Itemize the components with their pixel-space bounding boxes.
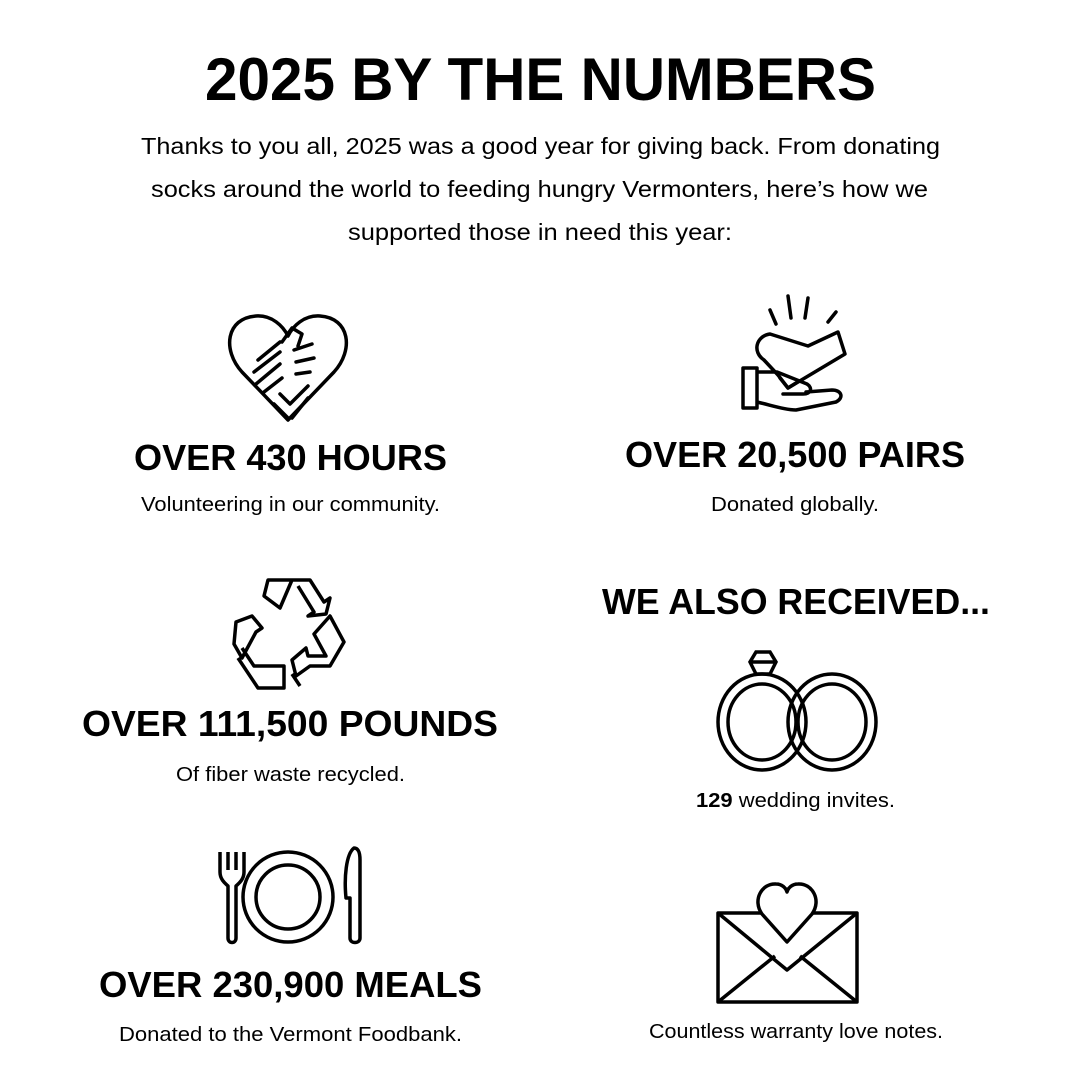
icon: recycle xyxy=(234,580,344,688)
icon: sock and hand xyxy=(743,296,845,410)
text: fiber waste: Of fiber waste recycled. xyxy=(176,764,405,786)
heading: pairs: OVER 20,500 PAIRS xyxy=(625,434,965,475)
text: love notes: Countless warranty love notes. xyxy=(649,1021,943,1043)
text: volunteering: Volunteering in our community. xyxy=(141,494,440,516)
text: donated globally: Donated globally. xyxy=(711,494,879,516)
heading: meals: OVER 230,900 MEALS xyxy=(99,964,482,1005)
icon: plate and cutlery xyxy=(220,848,360,942)
title: 2025 BY THE NUMBERS xyxy=(205,46,876,113)
icon: wedding rings xyxy=(718,652,876,770)
intro paragraph: socks around the world to feeding hungry Vermonters, here’s how we xyxy=(151,176,928,202)
text: wedding invites: 129 wedding invites. xyxy=(696,790,895,812)
icon: heart with handshake xyxy=(230,316,346,420)
intro paragraph xyxy=(141,133,940,245)
icon: envelope with heart xyxy=(718,884,857,1002)
intro paragraph: Thanks to you all, 2025 was a good year for giving back. From donating xyxy=(141,133,940,159)
intro paragraph: supported those in need this year: xyxy=(348,219,732,245)
heading: we also received: WE ALSO RECEIVED... xyxy=(602,581,990,622)
heading: pounds: OVER 111,500 POUNDS xyxy=(82,703,498,744)
heading: hours: OVER 430 HOURS xyxy=(134,437,447,478)
text: foodbank: Donated to the Vermont Foodbank. xyxy=(119,1024,462,1046)
